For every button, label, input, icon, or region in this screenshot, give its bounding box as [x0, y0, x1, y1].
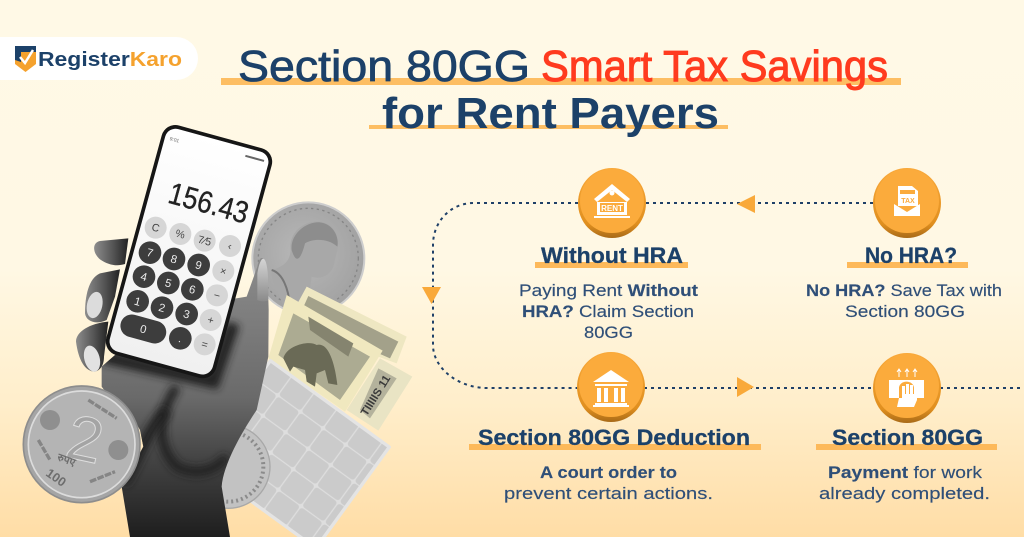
coin: two rupees — [23, 386, 140, 503]
fingernail 3 — [81, 344, 103, 374]
icon: logo shield — [15, 46, 36, 72]
body text: prevent certain actions. — [504, 485, 713, 503]
heading underline — [469, 444, 761, 450]
title line 1 navy: Section 80GG — [238, 42, 530, 91]
palm and wrist — [102, 258, 269, 537]
title underline 2 — [369, 125, 728, 129]
body text — [819, 464, 990, 503]
heading: Section 80GG — [832, 425, 983, 450]
key labels: 2 — [157, 302, 166, 315]
heading: No HRA? — [865, 243, 957, 268]
status bar: 9:01 — [169, 136, 180, 145]
body text: 80GG — [584, 324, 633, 342]
key labels: ‹ — [227, 240, 234, 253]
hand shading — [103, 323, 233, 483]
title line 2: for Rent Payers — [382, 89, 719, 138]
heading: Section 80GG Deduction — [478, 425, 750, 450]
key labels: − — [212, 289, 221, 303]
key labels — [133, 222, 234, 352]
key labels: C — [150, 222, 161, 235]
key labels: 7 — [145, 247, 154, 260]
fingernail 2 — [84, 290, 105, 320]
heading underline — [535, 262, 688, 268]
coin: two rupees: 2 — [60, 402, 109, 478]
banknotes — [268, 287, 412, 431]
key labels: 5 — [163, 277, 173, 291]
dark number keys — [118, 241, 210, 350]
icon: tax envelope — [873, 168, 941, 238]
key labels: + — [206, 314, 215, 327]
key labels: 3 — [182, 308, 191, 322]
banknote: right: TIIIIIS 11 — [359, 373, 393, 418]
logo wordmark: Register Karo — [38, 48, 182, 71]
body text: Paying Rent Without — [519, 282, 699, 300]
arrow: down — [422, 287, 441, 304]
body text: Payment for work — [828, 464, 983, 482]
title underline 1 — [221, 78, 901, 85]
coin: two rupees: 100 — [43, 466, 69, 490]
arrow: left — [737, 195, 755, 213]
key labels: 1 — [133, 296, 142, 309]
title line 1 red: Smart Tax Savings — [541, 42, 888, 91]
hand — [76, 238, 269, 537]
light function keys — [145, 217, 241, 355]
coin: top portrait — [252, 202, 364, 314]
finger 2 — [85, 269, 120, 322]
heading: Without HRA — [541, 243, 683, 268]
panel: no HRA — [806, 168, 1002, 321]
banknote: back — [287, 287, 407, 363]
coin: two rupees: रुपए — [55, 451, 78, 469]
icon: cash payment — [873, 353, 941, 423]
icon: tax envelope: TAX — [901, 198, 915, 205]
panel: section 80GG — [816, 353, 997, 503]
key labels: % — [174, 228, 187, 242]
dotted flow path — [433, 203, 1024, 388]
body text: No HRA? Save Tax with — [806, 282, 1002, 300]
icon: bank building — [577, 352, 645, 422]
banknote: right — [347, 358, 412, 431]
body text: already completed. — [819, 485, 990, 503]
title — [221, 42, 901, 138]
body text: A court order to — [540, 464, 677, 482]
body text — [519, 282, 699, 342]
panel: without HRA — [519, 168, 699, 342]
key labels: . — [177, 333, 183, 345]
finger 3 — [76, 322, 108, 372]
body text: HRA? Claim Section — [522, 303, 694, 321]
phone — [103, 122, 275, 381]
key labels: 7⁄5 — [196, 234, 213, 249]
key labels: 6 — [187, 284, 197, 297]
heading underline — [816, 444, 997, 450]
wallet — [195, 358, 392, 537]
body text: Section 80GG — [845, 303, 965, 321]
key labels: 8 — [169, 253, 178, 267]
small coin behind hand — [187, 425, 270, 508]
illustration: hand, phone, coins, cash, wallet — [23, 122, 412, 537]
icon: rent house: RENT — [601, 204, 623, 213]
logo badge — [0, 37, 198, 80]
body text — [806, 282, 1002, 321]
key labels: × — [219, 265, 228, 278]
panel: section 80GG deduction — [469, 352, 761, 503]
finger 1 — [94, 238, 128, 265]
body text — [504, 464, 713, 503]
phone body — [103, 122, 275, 381]
key labels: = — [200, 338, 209, 352]
status bar — [169, 136, 264, 162]
key labels: 4 — [139, 271, 148, 284]
icon: rent house — [578, 168, 646, 238]
keypad — [118, 217, 241, 355]
key labels: 9 — [194, 259, 203, 273]
banknote: front with elephant — [268, 295, 383, 412]
phone display number: 156.43 — [165, 176, 252, 231]
heading underline — [847, 262, 968, 268]
key labels: 0 — [138, 323, 148, 337]
thumb highlight — [257, 259, 268, 301]
arrow: right — [737, 377, 754, 397]
